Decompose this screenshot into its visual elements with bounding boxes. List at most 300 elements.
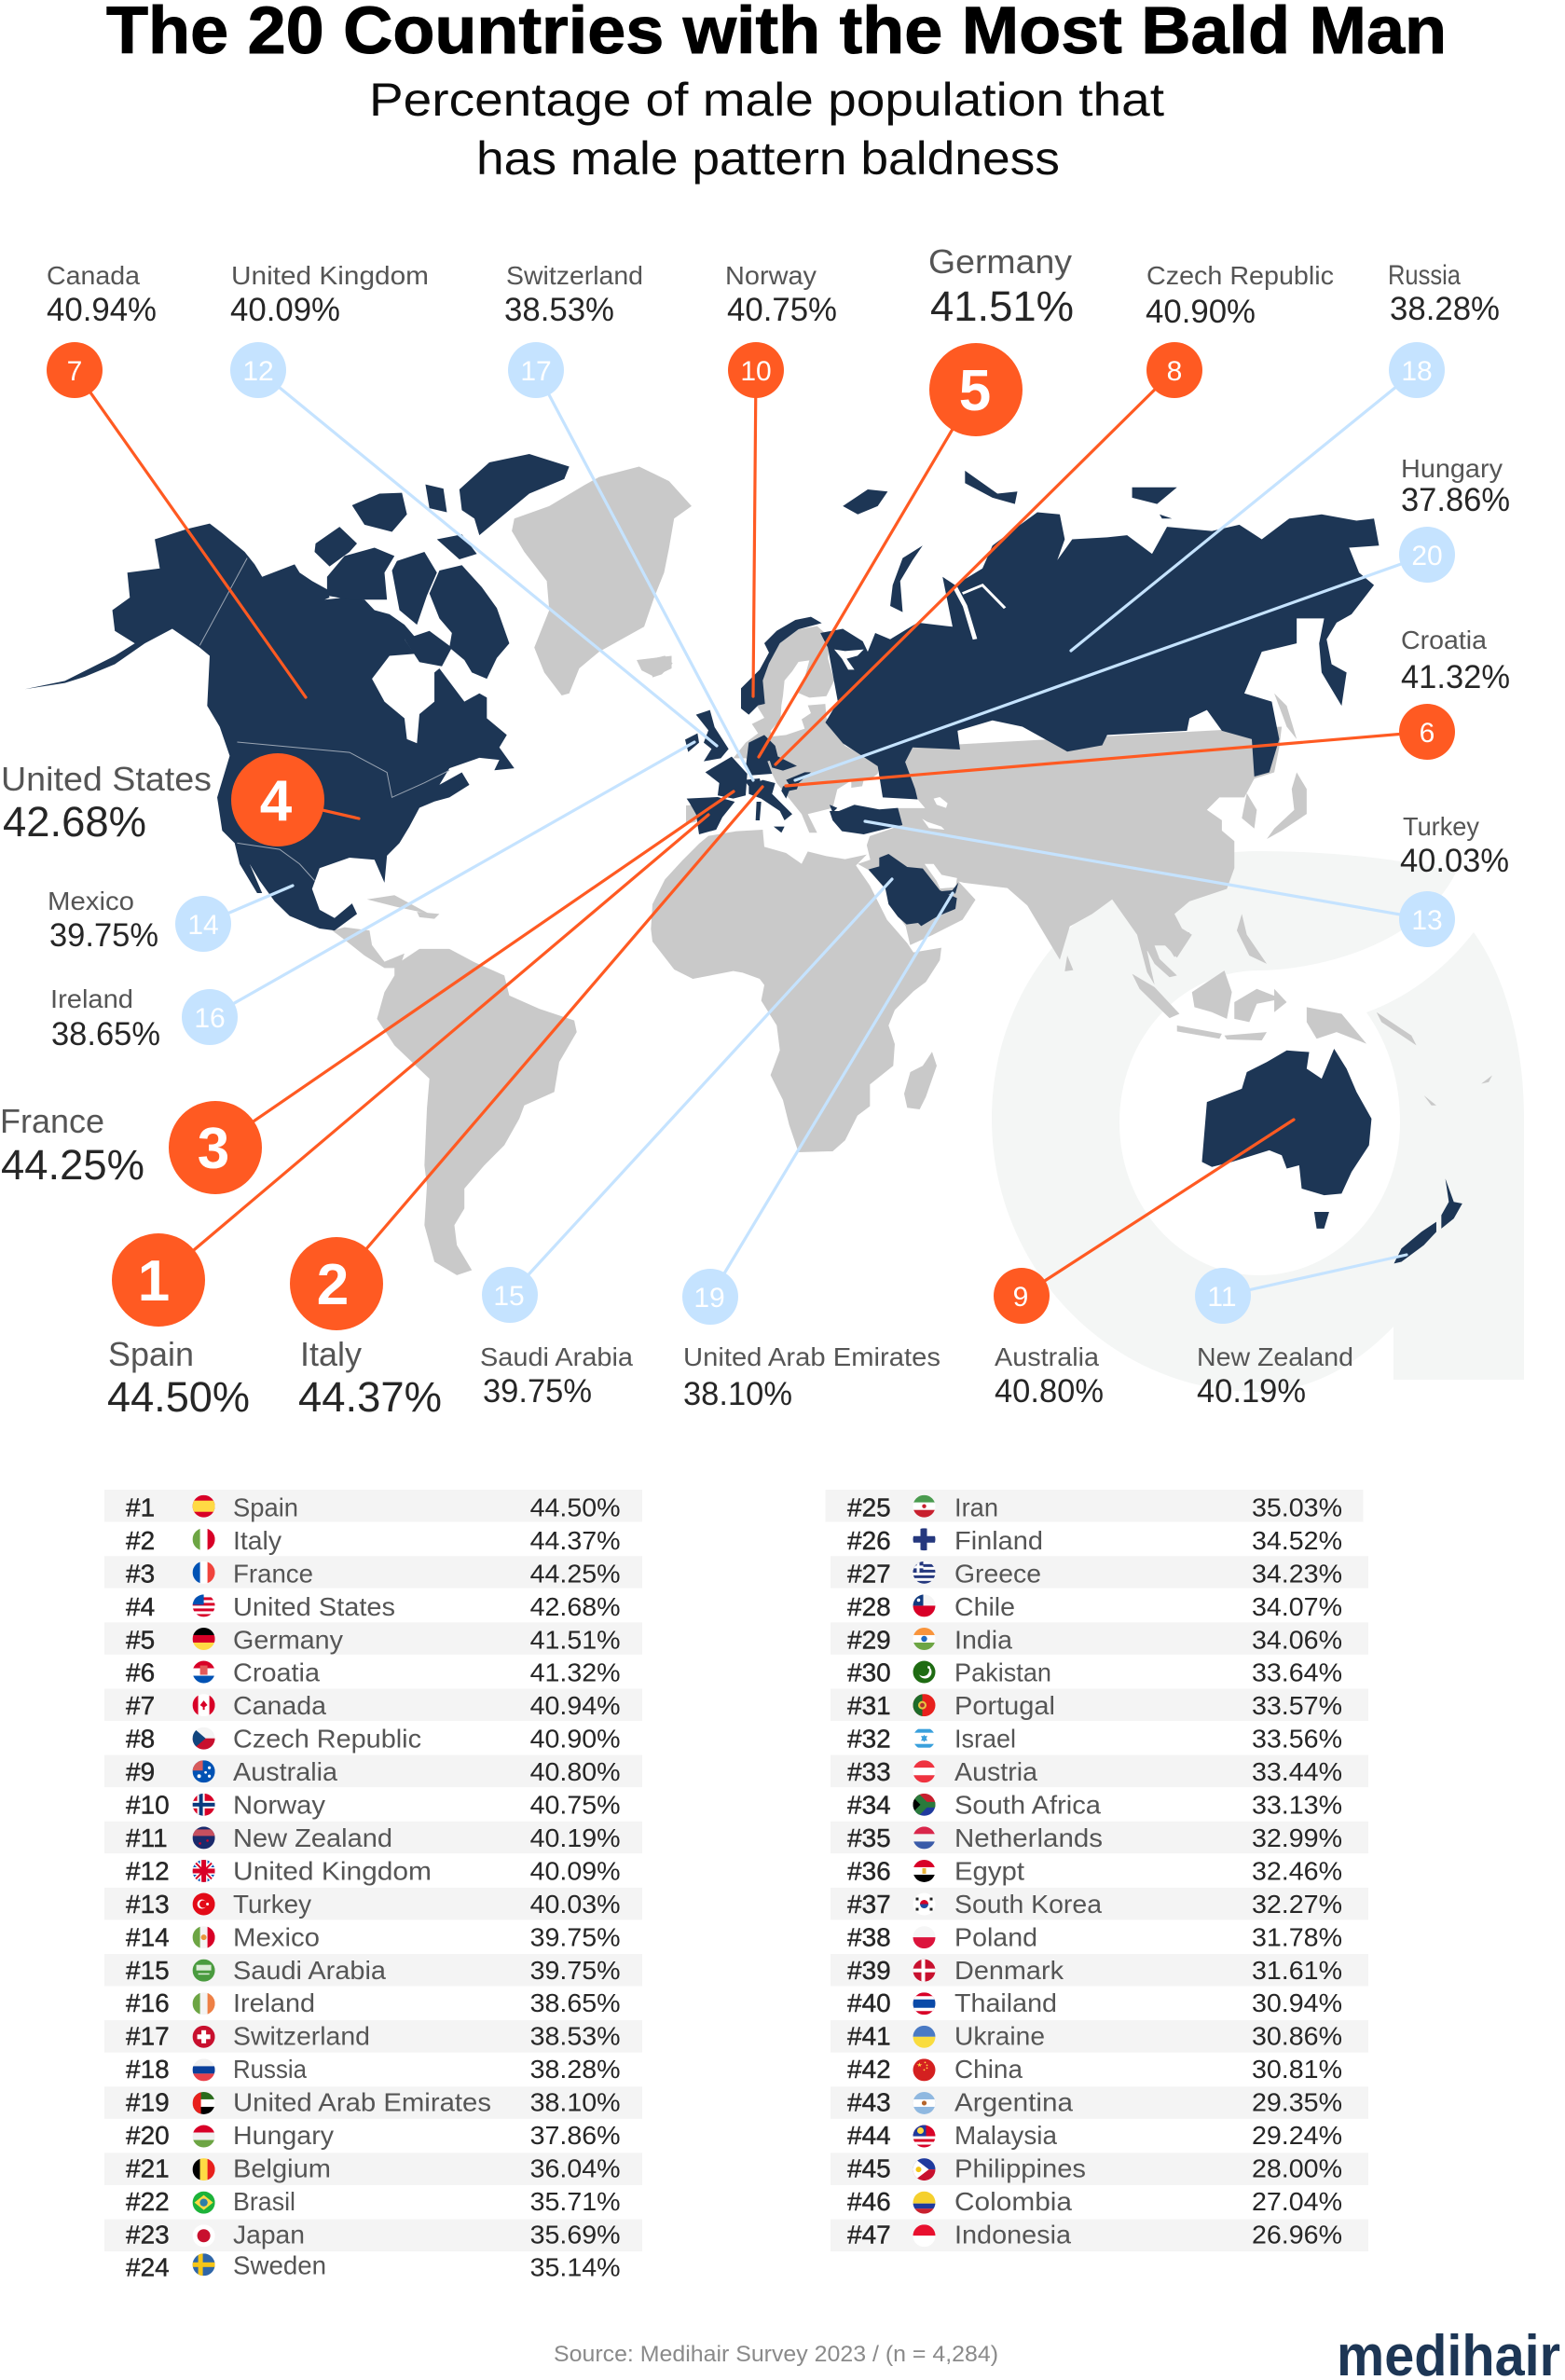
callout: Canada: 7 [67, 356, 82, 387]
flag: Germany [193, 1628, 215, 1650]
flag: Indonesia [913, 2224, 936, 2247]
callout: Czech Republic [776, 261, 1334, 764]
flag: Chile [913, 1594, 936, 1616]
row: #45 Philippines: #45 [847, 2153, 891, 2183]
row: #31 Portugal: Portugal [954, 1691, 1055, 1720]
row: #35 Netherlands: Netherlands [954, 1823, 1103, 1852]
row: #34 South Africa [847, 1791, 1342, 1820]
row: #45 Philippines: 28.00% [1252, 2153, 1342, 2183]
flag: Malaysia [913, 2125, 936, 2148]
flag: Turkey [193, 1893, 215, 1916]
map: inland seas [771, 660, 957, 888]
flag: India [913, 1628, 936, 1650]
map: North American borders [199, 558, 449, 881]
row: #29 India: 34.06% [1252, 1625, 1342, 1654]
row: #1 Spain: Spain [233, 1493, 298, 1521]
map: gray land, Americas north [332, 466, 692, 968]
row: #25 Iran: #25 [847, 1493, 891, 1521]
row: #46 Colombia: #46 [847, 2187, 891, 2216]
flag: United Arab Emirates [193, 2092, 215, 2114]
watermark: large letter a [992, 851, 1524, 1392]
row: #29 India: India [954, 1625, 1012, 1654]
row: #38 Poland [847, 1922, 1342, 1951]
row: #3 France: France [233, 1559, 313, 1588]
row: #37 South Korea [831, 1888, 1368, 1919]
callout: Spain: Spain [108, 1335, 194, 1373]
subtitle: has male pattern baldness [476, 132, 1060, 185]
callout: United Kingdom: 12 [242, 356, 274, 387]
map: gray land, Asia [858, 694, 1307, 984]
flag: Canada [193, 1694, 215, 1716]
flag: South Korea [913, 1893, 936, 1916]
flag: Greece [913, 1561, 936, 1584]
row: #47 Indonesia: Indonesia [954, 2220, 1071, 2249]
row: #14 Mexico: 39.75% [530, 1922, 621, 1951]
callout: Italy: Italy [300, 1335, 362, 1373]
flag: Croatia [193, 1661, 215, 1684]
map: navy Oceania [1201, 1049, 1462, 1263]
callout: France: France [0, 1102, 104, 1140]
row: #10 Norway: Norway [233, 1791, 325, 1820]
row: #23 Japan: 35.69% [530, 2220, 621, 2249]
row: #13 Turkey: 40.03% [530, 1890, 621, 1919]
row: #8 Czech Republic [125, 1727, 620, 1753]
callout: United Arab Emirates: United Arab Emirates [683, 1342, 940, 1371]
callout: Russia: Russia [1388, 260, 1461, 291]
callout: United States: 42.68% [3, 798, 146, 846]
subtitle [369, 74, 1164, 185]
row: #30 Pakistan: #30 [847, 1658, 891, 1687]
map: gray land, Southeast Asia islands [1133, 932, 1492, 1106]
flag: Sweden [193, 2253, 215, 2276]
callout: New Zealand: 40.19% [1197, 1373, 1306, 1410]
row: #11 New Zealand [104, 1822, 642, 1853]
row: #2 Italy: Italy [233, 1526, 281, 1555]
callout: Turkey: 13 [1411, 905, 1443, 936]
callout: Spain: 44.50% [107, 1373, 250, 1421]
row: #30 Pakistan: Pakistan [954, 1658, 1051, 1687]
row: #27 Greece: #27 [847, 1559, 891, 1588]
flag: Switzerland [193, 2026, 215, 2048]
callout: Czech Republic: Czech Republic [1146, 261, 1334, 290]
row: #3 France [104, 1556, 642, 1589]
subtitle: Percentage of male population that [369, 74, 1164, 126]
map: navy Russia [820, 471, 1379, 800]
ranking table: right column [826, 1490, 1368, 2251]
callout: Canada: 40.94% [47, 292, 157, 328]
row: #40 Thailand: 30.94% [1252, 1988, 1342, 2017]
row: #7 Canada: #7 [126, 1691, 155, 1720]
row: #21 Belgium: #21 [126, 2153, 170, 2183]
row: #13 Turkey: Turkey [233, 1890, 311, 1919]
row: #37 South Korea: South Korea [954, 1890, 1102, 1919]
row: #33 Austria: Austria [954, 1757, 1037, 1786]
row: #26 Finland: #26 [847, 1526, 891, 1555]
row: #1 Spain: 44.50% [530, 1493, 621, 1521]
callout: Hungary [795, 454, 1510, 780]
flag: New Zealand [193, 1826, 215, 1849]
row: #32 Israel [847, 1725, 1342, 1754]
callout: Germany [759, 242, 1074, 757]
flag: Spain [193, 1495, 215, 1518]
callout: Croatia: 41.32% [1401, 659, 1510, 695]
callout: New Zealand: New Zealand [1197, 1342, 1353, 1371]
row: #18 Russia [125, 2058, 620, 2081]
flag: France [193, 1561, 215, 1584]
callout: Italy [290, 787, 762, 1421]
world map [25, 454, 1492, 1275]
row: #17 Switzerland: 38.53% [530, 2022, 621, 2051]
callout: Ireland [50, 742, 694, 1052]
flag: Russia [193, 2058, 215, 2081]
row: #4 United States: #4 [126, 1592, 155, 1621]
row: #24 Sweden: #24 [126, 2253, 170, 2282]
callout: France: 3 [198, 1117, 229, 1181]
row: #16 Ireland: Ireland [233, 1988, 315, 2017]
row: #8 Czech Republic: #8 [126, 1725, 155, 1754]
row: #11 New Zealand: 40.19% [530, 1823, 621, 1852]
row: #15 Saudi Arabia [104, 1954, 642, 1986]
row: #33 Austria: 33.44% [1252, 1757, 1342, 1786]
callout: Saudi Arabia: 15 [493, 1281, 525, 1312]
row: #8 Czech Republic: 40.90% [530, 1725, 621, 1754]
callout: Turkey: 40.03% [1400, 843, 1509, 879]
callout: Germany: 41.51% [930, 282, 1074, 330]
flag: Australia [193, 1760, 215, 1782]
row: #20 Hungary: #20 [126, 2121, 170, 2150]
row: #31 Portugal: #31 [847, 1691, 891, 1720]
row: #14 Mexico: #14 [126, 1922, 170, 1951]
row: #22 Brasil: 35.71% [530, 2187, 621, 2216]
row: #4 United States: 42.68% [530, 1592, 621, 1621]
row: #38 Poland: Poland [954, 1922, 1037, 1951]
row: #21 Belgium [104, 2153, 642, 2185]
callout: United Kingdom [230, 261, 717, 746]
row: #27 Greece: 34.23% [1252, 1559, 1342, 1588]
row: #44 Malaysia: 29.24% [1252, 2121, 1342, 2150]
row: #39 Denmark: #39 [847, 1956, 891, 1985]
callout: United Kingdom: 40.09% [230, 292, 340, 328]
row: #17 Switzerland: #17 [126, 2022, 170, 2051]
row: #29 India [831, 1622, 1368, 1655]
callout: United States: United States [1, 760, 212, 798]
flag: Poland [913, 1926, 936, 1948]
row: #9 Australia: 40.80% [530, 1757, 621, 1786]
row: #2 Italy: #2 [126, 1526, 155, 1555]
row: #34 South Africa: 33.13% [1252, 1791, 1342, 1820]
flag: Czech Republic [193, 1727, 215, 1750]
callout: Switzerland [504, 261, 753, 780]
row: #23 Japan: #23 [126, 2220, 170, 2249]
callout: United Arab Emirates: 38.10% [683, 1376, 792, 1412]
row: #4 United States: United States [233, 1592, 395, 1621]
callout: Spain: 1 [138, 1249, 170, 1314]
row: #33 Austria [831, 1755, 1368, 1787]
row: #31 Portugal: 33.57% [1252, 1691, 1342, 1720]
flag: Thailand [913, 1992, 936, 2015]
row: #32 Israel: #32 [847, 1725, 891, 1754]
callout: United States: 4 [260, 769, 293, 833]
callout: Croatia [786, 626, 1510, 786]
map: White Sea [834, 650, 864, 669]
row: #36 Egypt: Egypt [954, 1856, 1024, 1885]
callout: Ireland: Ireland [50, 984, 133, 1013]
callout: Canada: Canada [47, 261, 140, 290]
flag: Iran [913, 1495, 936, 1518]
row: #1 Spain [104, 1490, 642, 1521]
row: #19 United Arab Emirates: #19 [126, 2088, 170, 2117]
callout: France: 44.25% [1, 1141, 144, 1189]
callout: Australia [994, 1120, 1294, 1410]
callout: Switzerland: 38.53% [504, 292, 614, 328]
map: gray land, Africa and Madagascar [651, 830, 941, 1152]
callout: Saudi Arabia [480, 879, 892, 1410]
row: #30 Pakistan [847, 1658, 1342, 1687]
row: #32 Israel: 33.56% [1252, 1725, 1342, 1754]
row: #36 Egypt: 32.46% [1252, 1856, 1342, 1885]
row: #12 United Kingdom: #12 [126, 1856, 170, 1885]
flag: Netherlands [913, 1826, 936, 1849]
row: #9 Australia: Australia [233, 1757, 337, 1786]
row: #18 Russia: 38.28% [530, 2055, 621, 2084]
row: #18 Russia: #18 [126, 2055, 170, 2084]
callout: Germany: Germany [928, 242, 1072, 281]
row: #2 Italy: 44.37% [530, 1526, 621, 1555]
callout: Mexico: 39.75% [49, 917, 158, 954]
row: #28 Chile [847, 1592, 1342, 1621]
row: #25 Iran [826, 1490, 1363, 1521]
row: #41 Ukraine: #41 [847, 2022, 891, 2051]
callout: France [0, 791, 734, 1194]
callout: Australia: 9 [1013, 1282, 1028, 1313]
callout: Mexico [48, 886, 293, 954]
row: #6 Croatia: Croatia [233, 1658, 320, 1687]
row: #38 Poland: 31.78% [1252, 1922, 1342, 1951]
row: #16 Ireland: 38.65% [530, 1988, 621, 2017]
row: #41 Ukraine [831, 2020, 1368, 2053]
callout: Switzerland: 17 [520, 356, 552, 387]
callout: Norway: Norway [725, 261, 817, 290]
callout: Turkey: Turkey [1403, 812, 1479, 841]
callout: Mexico: 14 [187, 910, 219, 941]
callout: Ireland: 16 [194, 1003, 226, 1034]
row: #32 Israel: Israel [954, 1725, 1016, 1754]
callout: Russia: 38.28% [1390, 291, 1500, 327]
callout: Mexico: Mexico [48, 887, 134, 915]
flag: Brasil [193, 2192, 215, 2214]
callout: Saudi Arabia: Saudi Arabia [480, 1342, 633, 1371]
row: #37 South Korea: 32.27% [1252, 1890, 1342, 1919]
row: #22 Brasil: Brasil [233, 2187, 295, 2216]
row: #44 Malaysia: #44 [847, 2121, 891, 2150]
callout: United Arab Emirates [682, 893, 953, 1412]
row: #31 Portugal [831, 1688, 1368, 1721]
flag: Italy [193, 1528, 215, 1550]
row: #40 Thailand [847, 1988, 1342, 2017]
row: #19 United Arab Emirates: United Arab Emirates [233, 2088, 491, 2117]
row: #7 Canada [104, 1688, 642, 1721]
row: #12 United Kingdom: 40.09% [530, 1856, 621, 1885]
row: #21 Belgium: Belgium [233, 2153, 331, 2183]
ranking table: left column [104, 1490, 642, 2282]
map: navy Arabia [869, 854, 958, 926]
row: #23 Japan [104, 2220, 642, 2251]
flag: United States [193, 1594, 215, 1616]
row: #39 Denmark: 31.61% [1252, 1956, 1342, 1985]
row: #44 Malaysia [847, 2121, 1342, 2150]
callout: Hungary: Hungary [1401, 454, 1503, 483]
row: #17 Switzerland: Switzerland [233, 2022, 370, 2051]
row: #39 Denmark: Denmark [954, 1956, 1064, 1985]
row: #35 Netherlands: 32.99% [1252, 1823, 1342, 1852]
flag: Finland [913, 1528, 936, 1550]
callout: Australia: Australia [995, 1342, 1099, 1371]
row: #6 Croatia: #6 [126, 1658, 155, 1687]
callout: Ireland: 38.65% [51, 1016, 160, 1052]
row: #7 Canada: 40.94% [530, 1691, 621, 1720]
callout: Russia [1071, 260, 1500, 651]
row: #24 Sweden: Sweden [233, 2251, 326, 2280]
row: #17 Switzerland [104, 2020, 642, 2053]
row: #15 Saudi Arabia: 39.75% [530, 1956, 621, 1985]
row: #40 Thailand: #40 [847, 1988, 891, 2017]
row: #20 Hungary: 37.86% [530, 2121, 621, 2150]
row: #14 Mexico [125, 1926, 620, 1948]
callout: Italy: 2 [317, 1253, 349, 1317]
row: #11 New Zealand: New Zealand [233, 1823, 392, 1852]
row: #4 United States [125, 1594, 620, 1616]
row: #3 France: 44.25% [530, 1559, 621, 1588]
callout: United Arab Emirates: 19 [693, 1283, 725, 1314]
callout: Spain [107, 815, 708, 1421]
row: #26 Finland: 34.52% [1252, 1526, 1342, 1555]
row: #42 China [847, 2055, 1342, 2084]
row: #46 Colombia [847, 2187, 1342, 2216]
row: #11 New Zealand: #11 [126, 1823, 168, 1852]
row: #22 Brasil [126, 2187, 621, 2216]
row: #13 Turkey: #13 [126, 1890, 170, 1919]
row: #36 Egypt [847, 1856, 1342, 1885]
row: #12 United Kingdom [125, 1860, 620, 1885]
row: #24 Sweden [126, 2251, 621, 2282]
row: #18 Russia: Russia [233, 2055, 307, 2084]
callout: Croatia: Croatia [1401, 626, 1487, 654]
row: #9 Australia [104, 1755, 642, 1787]
row: #44 Malaysia: Malaysia [954, 2121, 1057, 2150]
map: gray land, Europe [652, 626, 879, 832]
row: #41 Ukraine: Ukraine [954, 2022, 1045, 2051]
flag: Ukraine [913, 2026, 936, 2048]
row: #46 Colombia: 27.04% [1252, 2187, 1342, 2216]
row: #34 South Africa: #34 [847, 1791, 891, 1820]
flag: China [913, 2058, 936, 2081]
row: #45 Philippines [831, 2153, 1368, 2185]
callout: Czech Republic: 8 [1167, 356, 1182, 387]
flag: Portugal [913, 1694, 936, 1716]
callout: Turkey [865, 812, 1509, 947]
flag: Japan [193, 2224, 215, 2247]
row: #7 Canada: Canada [233, 1691, 326, 1720]
row: #39 Denmark [831, 1954, 1368, 1986]
row: #43 Argentina: Argentina [954, 2088, 1073, 2117]
row: #21 Belgium: 36.04% [530, 2153, 621, 2183]
row: #27 Greece: Greece [954, 1559, 1041, 1588]
row: #28 Chile: Chile [954, 1592, 1015, 1621]
callout: New Zealand [1195, 1255, 1407, 1410]
row: #24 Sweden: 35.14% [530, 2253, 621, 2282]
row: #8 Czech Republic: Czech Republic [233, 1725, 421, 1754]
row: #25 Iran: Iran [954, 1493, 998, 1521]
callout: Australia: 40.80% [995, 1373, 1104, 1410]
row: #25 Iran: 35.03% [1252, 1493, 1342, 1521]
map: navy North America [25, 454, 570, 930]
row: #43 Argentina: 29.35% [1252, 2088, 1342, 2117]
row: #10 Norway: 40.75% [530, 1791, 621, 1820]
row: #15 Saudi Arabia: Saudi Arabia [233, 1956, 386, 1985]
row: #43 Argentina [831, 2086, 1368, 2119]
row: #14 Mexico: Mexico [233, 1922, 320, 1951]
flag: Denmark [913, 1960, 936, 1982]
row: #10 Norway [126, 1791, 621, 1820]
row: #45 Philippines: Philippines [954, 2153, 1086, 2183]
row: #16 Ireland: #16 [126, 1988, 170, 2017]
flag: Norway [193, 1794, 215, 1816]
row: #20 Hungary: Hungary [233, 2121, 334, 2150]
flag: Egypt [913, 1860, 936, 1882]
row: #6 Croatia: 41.32% [530, 1658, 621, 1687]
row: #19 United Arab Emirates: 38.10% [530, 2088, 621, 2117]
row: #42 China: #42 [847, 2055, 891, 2084]
row: #16 Ireland [125, 1993, 620, 2015]
row: #3 France: #3 [126, 1559, 155, 1588]
row: #41 Ukraine: 30.86% [1252, 2022, 1342, 2051]
callout: Canada [47, 261, 306, 697]
row: #6 Croatia [125, 1661, 620, 1684]
flag: Ireland [193, 1992, 215, 2015]
row: #26 Finland [847, 1526, 1342, 1555]
row: #28 Chile: #28 [847, 1592, 891, 1621]
callout: Norway: 10 [740, 356, 772, 387]
source note: Source: Medihair Survey 2023 / (n = 4,284) [554, 2342, 998, 2367]
row: #36 Egypt: #36 [847, 1856, 891, 1885]
callout: Saudi Arabia: 39.75% [483, 1373, 592, 1410]
row: #35 Netherlands: #35 [847, 1823, 891, 1852]
row: #22 Brasil: #22 [126, 2187, 170, 2216]
row: #42 China: China [954, 2055, 1023, 2084]
callout: New Zealand: 11 [1207, 1282, 1237, 1313]
row: #5 Germany [104, 1622, 642, 1655]
row: #26 Finland: Finland [954, 1526, 1043, 1555]
callout: Czech Republic: 40.90% [1146, 294, 1256, 330]
row: #40 Thailand: Thailand [954, 1988, 1057, 2017]
row: #42 China: 30.81% [1252, 2055, 1342, 2084]
callout: Hungary: 37.86% [1401, 482, 1510, 518]
flag: Austria [913, 1760, 936, 1782]
callout: Russia: 18 [1401, 356, 1433, 387]
flag: Belgium [193, 2158, 215, 2181]
flag: Philippines [913, 2157, 936, 2181]
row: #29 India: #29 [847, 1625, 891, 1654]
row: #33 Austria: #33 [847, 1757, 891, 1786]
flag: Pakistan [913, 1661, 936, 1684]
flag: Saudi Arabia [193, 1960, 215, 1982]
callout: Italy: 44.37% [298, 1373, 442, 1421]
row: #46 Colombia: Colombia [954, 2187, 1072, 2216]
callout: Germany: 5 [959, 359, 991, 423]
row: #9 Australia: #9 [126, 1757, 155, 1786]
row: #5 Germany: Germany [233, 1625, 343, 1654]
map: white rivers and gulfs in Russia [955, 585, 1005, 640]
